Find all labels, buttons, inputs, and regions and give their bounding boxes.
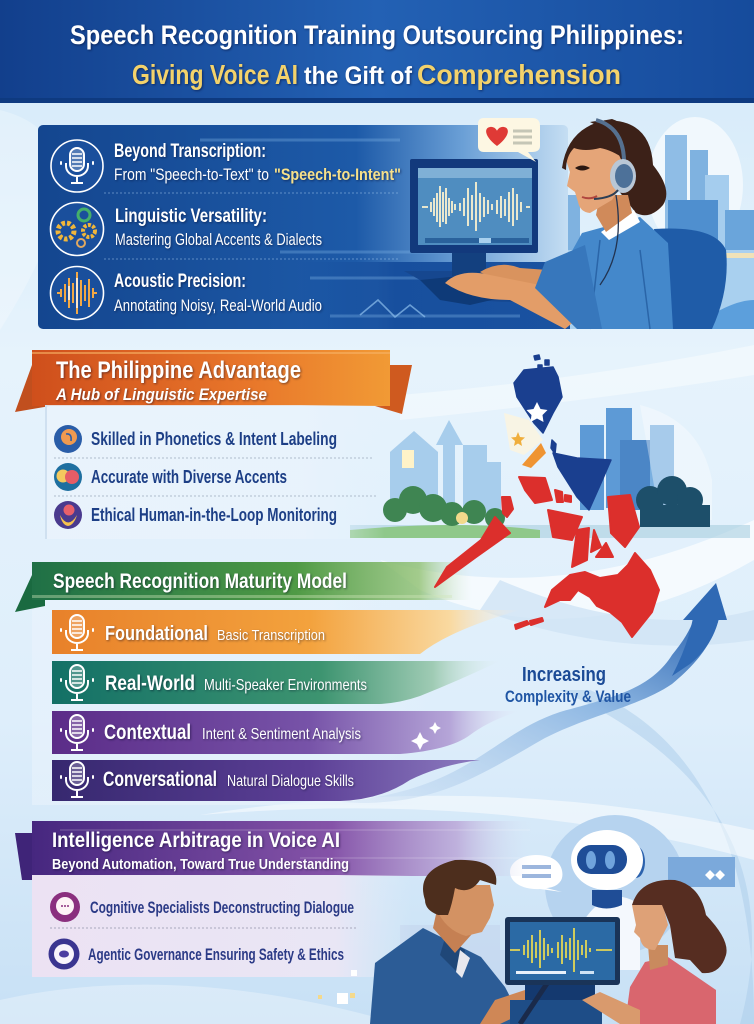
icon: gears bbox=[50, 202, 104, 256]
arrow label: Complexity & Value bbox=[505, 687, 631, 706]
pillar text: beyond transcription: Beyond Transcription: bbox=[114, 141, 266, 162]
illustration: woman colleague bbox=[582, 880, 727, 1024]
speech bubble: heart bbox=[478, 118, 540, 162]
title: Speech Recognition Training Outsourcing Philippines: bbox=[70, 20, 684, 50]
banner: maturity model bbox=[15, 562, 472, 612]
city and trees behind philippine advantage bbox=[350, 405, 750, 538]
headset bbox=[594, 120, 636, 285]
row text: Natural Dialogue Skills bbox=[227, 773, 354, 790]
banner heading bbox=[52, 829, 349, 873]
icon: sound wave bbox=[50, 266, 104, 320]
maturity row: real-world bbox=[52, 661, 500, 704]
banner heading: Speech Recognition Maturity Model bbox=[53, 570, 347, 593]
pillar text: beyond transcription bbox=[114, 141, 401, 184]
banner heading: A Hub of Linguistic Expertise bbox=[55, 385, 267, 404]
pillar text: beyond transcription: "Speech-to-Intent" bbox=[274, 165, 401, 184]
list item text: Agentic Governance Ensuring Safety & Ethics bbox=[88, 945, 344, 964]
list item text: Cognitive Specialists Deconstructing Dialogue bbox=[90, 898, 354, 917]
illustration: robot bbox=[400, 815, 735, 1024]
banner heading bbox=[55, 357, 301, 404]
title: Comprehension bbox=[417, 59, 621, 90]
row text: Multi-Speaker Environments bbox=[204, 677, 367, 694]
arrow label bbox=[505, 664, 631, 706]
icon: dialogue bbox=[50, 892, 80, 922]
arrow label: Increasing bbox=[522, 664, 606, 686]
title: the Gift of bbox=[304, 62, 413, 90]
row text: Basic Transcription bbox=[217, 627, 325, 644]
hair fringe bbox=[562, 119, 627, 170]
pillar text: linguistic versatility: Linguistic Versatility: bbox=[115, 206, 267, 227]
arrow: increasing complexity bbox=[340, 583, 727, 803]
banner heading: The Philippine Advantage bbox=[56, 357, 301, 384]
icon: ethics bbox=[54, 501, 82, 529]
icon: governance bbox=[48, 938, 80, 970]
banner heading: Intelligence Arbitrage in Voice AI bbox=[52, 829, 340, 852]
list item text: Accurate with Diverse Accents bbox=[91, 467, 287, 487]
hair back bbox=[590, 120, 666, 215]
row text: Real-World bbox=[105, 672, 195, 695]
banner: intelligence arbitrage bbox=[15, 821, 532, 880]
row text bbox=[103, 768, 354, 791]
icon: phonetics bbox=[54, 425, 82, 453]
illustration backdrop: city skyline bbox=[530, 117, 754, 329]
title bbox=[70, 20, 684, 90]
icon: accents bbox=[54, 463, 82, 491]
panel: intelligence list bbox=[32, 875, 412, 977]
illustration: agent at monitor bbox=[404, 118, 727, 329]
pillar text: acoustic precision: Acoustic Precision: bbox=[114, 271, 246, 292]
map: philippines bbox=[435, 355, 659, 637]
title: Giving Voice AI bbox=[132, 59, 298, 90]
row text: Contextual bbox=[104, 721, 191, 744]
row text bbox=[105, 672, 367, 695]
row text bbox=[105, 623, 325, 645]
banner heading: Beyond Automation, Toward True Understanding bbox=[52, 856, 349, 873]
icon: microphone bbox=[51, 140, 103, 192]
list item text: Ethical Human-in-the-Loop Monitoring bbox=[91, 505, 337, 525]
panel: advantage list bbox=[45, 405, 385, 539]
neck and face bbox=[596, 195, 632, 232]
keyboard bbox=[420, 272, 535, 305]
row text: Intent & Sentiment Analysis bbox=[202, 726, 361, 743]
blouse bbox=[534, 217, 673, 329]
banner: the philippine advantage bbox=[15, 350, 412, 414]
panel: speech recognition pillars bbox=[38, 125, 570, 329]
row text bbox=[104, 721, 361, 744]
chair bbox=[654, 228, 727, 329]
pillar text: acoustic precision bbox=[114, 271, 322, 315]
pillar text: linguistic versatility: Mastering Global Accents & Dialects bbox=[115, 230, 322, 249]
illustration: man bbox=[370, 860, 530, 1024]
maturity row: contextual bbox=[52, 711, 520, 754]
header band bbox=[0, 0, 754, 103]
row text: Foundational bbox=[105, 623, 208, 645]
pillar text: beyond transcription: From "Speech-to-Text" to bbox=[114, 165, 269, 184]
monitor bbox=[410, 159, 538, 276]
maturity row: conversational bbox=[52, 760, 480, 801]
hands and arms bbox=[445, 245, 602, 329]
list item text: Skilled in Phonetics & Intent Labeling bbox=[91, 429, 337, 449]
maturity row: foundational bbox=[52, 610, 520, 654]
desk base bbox=[404, 271, 578, 302]
decorative sparkles bbox=[318, 970, 357, 1004]
speech bubble bbox=[510, 855, 562, 892]
illustration: laptop monitor bbox=[505, 917, 620, 1024]
robot body bbox=[575, 897, 640, 970]
pillar text: acoustic precision: Annotating Noisy, Real-World Audio bbox=[114, 296, 322, 315]
facial features bbox=[575, 166, 597, 198]
pillar text: linguistic versatility bbox=[115, 206, 322, 249]
row text: Conversational bbox=[103, 768, 217, 791]
